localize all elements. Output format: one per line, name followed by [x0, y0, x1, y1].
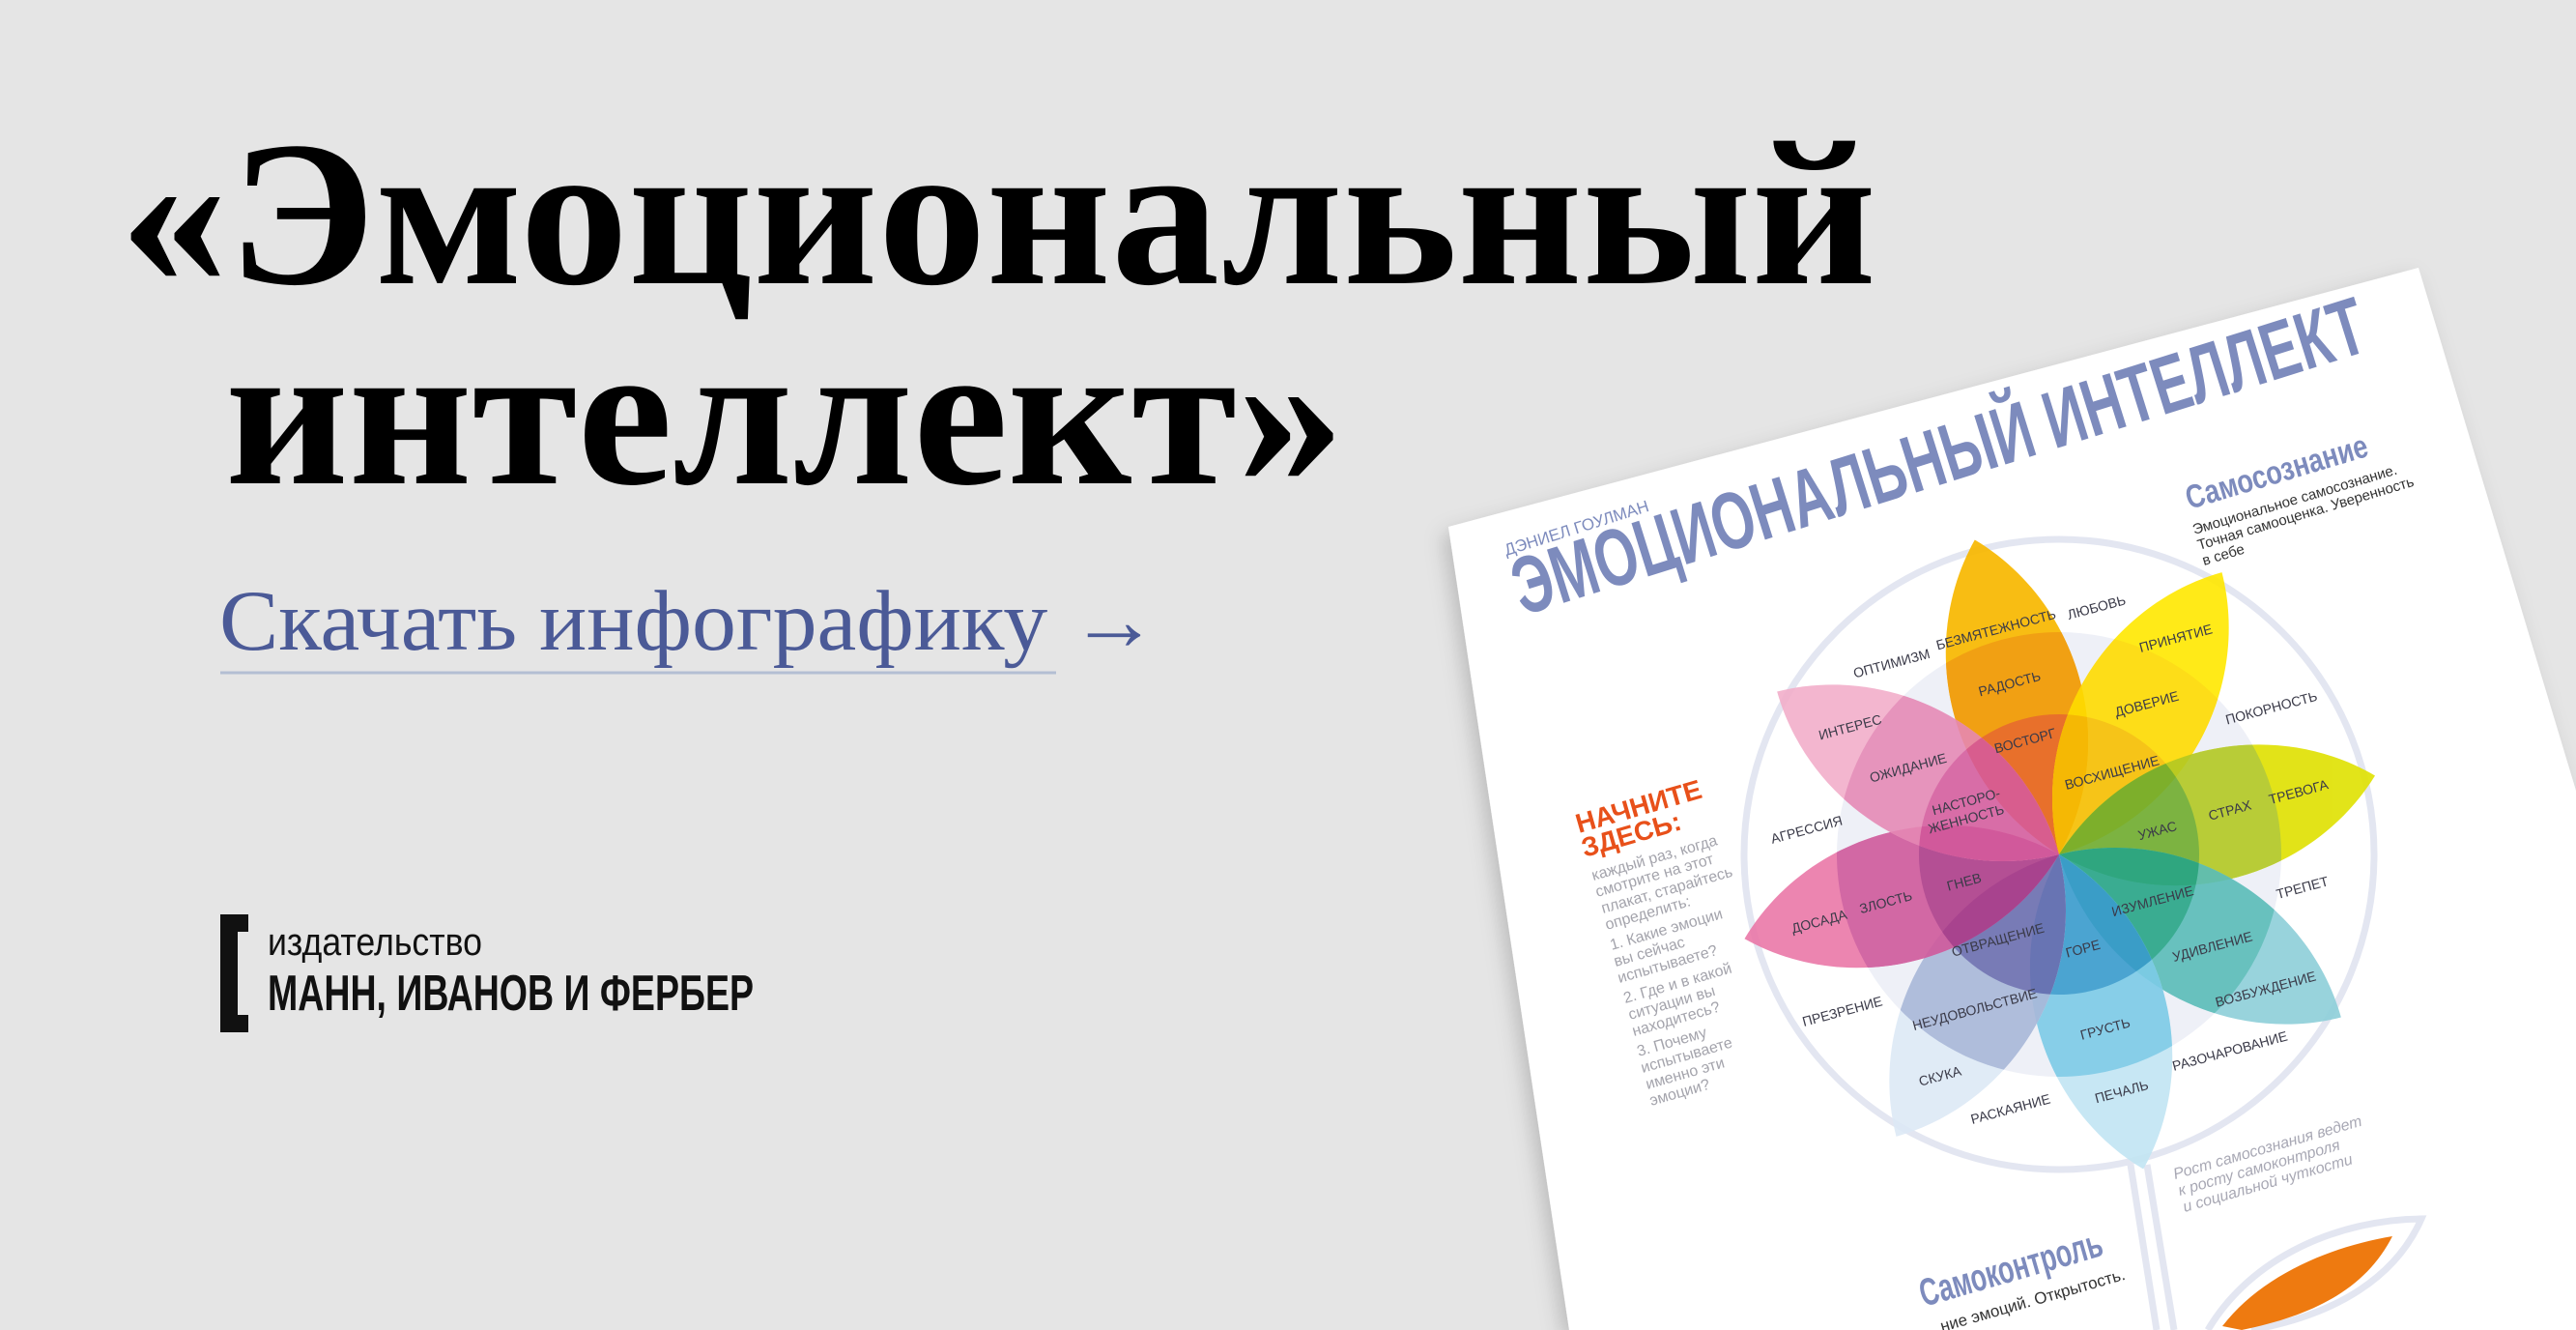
emotion labels: РАЗОЧАРОВАНИЕ — [2170, 1028, 2289, 1074]
title: «Эмоциональный — [120, 100, 1876, 329]
emotion labels: ПОКОРНОСТЬ — [2224, 688, 2319, 728]
start here block: НАЧНИТЕ — [1572, 774, 1705, 839]
self-awareness block: в себе — [2200, 541, 2247, 569]
poster title: ДЭНИЕЛ ГОУЛМАН — [1503, 497, 1651, 560]
emotion labels: УЖАС — [2136, 818, 2179, 843]
emotion labels: ВОСТОРГ — [1992, 725, 2058, 756]
emotion labels: ИЗУМЛЕНИЕ — [2110, 882, 2195, 919]
self-awareness block: Самосознание — [2181, 428, 2372, 517]
emotion labels: ПРЕЗРЕНИЕ — [1801, 993, 1884, 1029]
emotion labels: ОТВРАЩЕНИЕ — [1950, 920, 2046, 960]
publisher logo — [220, 914, 754, 1032]
petal: surprise — [2059, 848, 2341, 1025]
growth note: к росту самоконтроля — [2176, 1138, 2342, 1200]
emotion labels: ОПТИМИЗМ — [1851, 646, 1932, 680]
emotion labels: ПЕЧАЛЬ — [2093, 1077, 2150, 1106]
emotion labels: ВОЗБУЖДЕНИЕ — [2214, 969, 2318, 1010]
petal: joy — [1946, 539, 2088, 854]
start here block: ситуации вы — [1626, 983, 1717, 1024]
start here block: вы сейчас — [1612, 935, 1687, 970]
emotion labels: ВОСХИЩЕНИЕ — [2063, 752, 2161, 793]
emotion labels: ГРУСТЬ — [2078, 1015, 2132, 1043]
start here block: смотрите на этот — [1593, 852, 1716, 901]
emotion labels: БЕЗМЯТЕЖНОСТЬ — [1934, 606, 2057, 652]
start here block: определить: — [1603, 893, 1693, 934]
self-awareness block: Эмоциональное самосознание. — [2190, 462, 2399, 538]
start here block: именно эти — [1644, 1055, 1727, 1093]
emotion labels: РАСКАЯНИЕ — [1969, 1090, 2052, 1127]
emotion labels: ЛЮБОВЬ — [2066, 592, 2128, 622]
petal: disgust — [1889, 854, 2066, 1137]
emotion labels — [1769, 592, 2331, 1127]
growth note: Рост самосознания ведет — [2171, 1113, 2363, 1183]
petal: anger — [1745, 825, 2059, 969]
petal: fear — [2059, 744, 2375, 885]
emotion labels: НАСТОРО- — [1931, 785, 2002, 818]
start here block: 3. Почему — [1635, 1025, 1708, 1060]
self-awareness block: Точная самооценка. Уверенность — [2195, 474, 2416, 554]
emotion labels: СТРАХ — [2207, 796, 2253, 824]
start here block: каждый раз, когда — [1589, 832, 1719, 884]
start here block: находитесь? — [1630, 999, 1722, 1040]
emotion labels: ЗЛОСТЬ — [1858, 887, 1914, 916]
start here block — [1572, 774, 1734, 1110]
self-control heading: Самоконтроль — [1914, 1223, 2107, 1316]
title: интеллект» — [225, 300, 1344, 529]
start here block: испытываете? — [1616, 942, 1720, 987]
emotion labels: ИНТЕРЕС — [1817, 711, 1883, 743]
emotion labels: ТРЕПЕТ — [2275, 873, 2331, 902]
start here block: 2. Где и в какой — [1621, 961, 1733, 1007]
emotion labels: ДОСАДА — [1789, 907, 1849, 937]
emotion labels: ОЖИДАНИЕ — [1868, 750, 1948, 785]
emotion wheel — [1728, 523, 2390, 1186]
emotion labels: ТРЕВОГА — [2267, 776, 2331, 807]
publisher logo: МАНН, ИВАНОВ И ФЕРБЕР — [268, 966, 754, 1022]
emotion labels: ГОРЕ — [2064, 937, 2102, 961]
emotion labels: ГНЕВ — [1945, 870, 1983, 894]
petal: anticipation — [1777, 684, 2059, 861]
start here block: эмоции? — [1647, 1077, 1712, 1110]
poster title — [1501, 279, 2376, 632]
petal: trust — [2052, 572, 2229, 854]
emotion labels: ДОВЕРИЕ — [2113, 688, 2181, 720]
growth note: и социальной чуткости — [2181, 1151, 2355, 1216]
petal: sadness — [2030, 854, 2172, 1170]
emotion labels: ПРИНЯТИЕ — [2137, 621, 2214, 655]
start here block: испытываете — [1639, 1035, 1734, 1077]
title — [120, 100, 1876, 529]
emotion labels: СКУКА — [1917, 1062, 1963, 1089]
start here block: плакат, старайтесь — [1599, 864, 1734, 917]
publisher logo: издательство — [268, 921, 482, 964]
stem and leaf — [2131, 1165, 2421, 1330]
growth note — [2171, 1113, 2363, 1216]
self-control heading — [1914, 1223, 2128, 1330]
poster — [1448, 268, 2576, 1330]
self-awareness block — [2181, 428, 2416, 569]
emotion labels: УДИВЛЕНИЕ — [2171, 928, 2254, 965]
start here block: 1. Какие эмоции — [1608, 906, 1725, 954]
start here block: ЗДЕСЬ: — [1578, 806, 1684, 863]
emotion labels: НЕУДОВОЛЬСТВИЕ — [1911, 985, 2039, 1033]
emotion labels: РАДОСТЬ — [1977, 668, 2043, 699]
emotion labels: ЖЕННОСТЬ — [1927, 801, 2006, 836]
download link: Скачать инфографику → — [219, 574, 1159, 669]
emotion labels: АГРЕССИЯ — [1769, 813, 1844, 847]
